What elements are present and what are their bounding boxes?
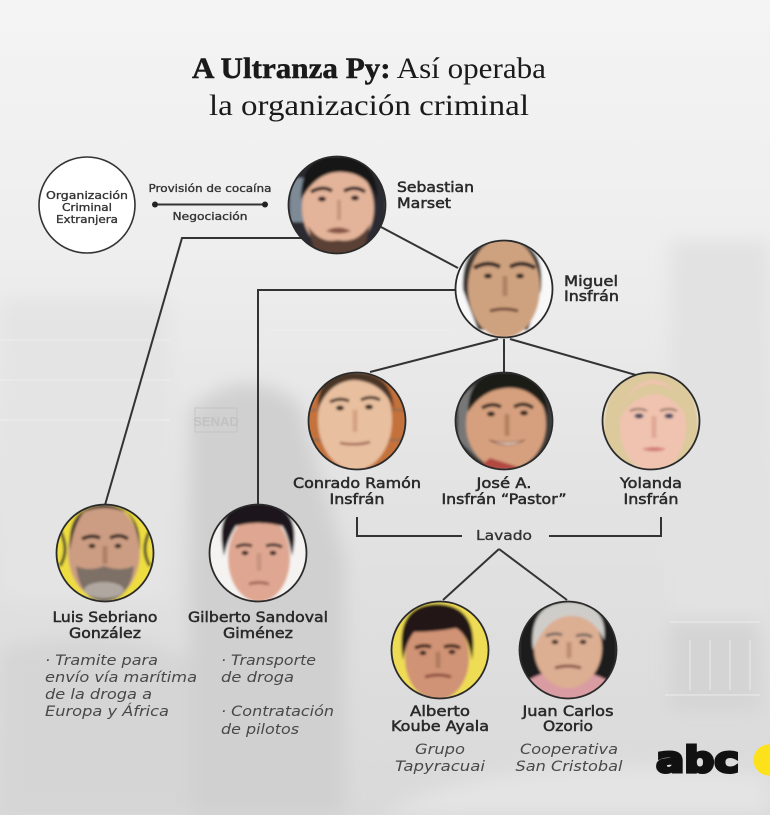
logo: abc: abc — [656, 740, 739, 781]
text: Alberto Koube role: Grupo — [415, 742, 465, 758]
label: José A. Insfrán "Pastor": José A. — [475, 476, 532, 492]
text: Alberto Koube role — [395, 742, 485, 775]
background: faded prison photo: SENAD — [193, 414, 239, 429]
label: José A. Insfrán "Pastor" — [442, 476, 566, 508]
label: Luis Sebriano González: González — [69, 626, 141, 642]
link: cocaine supply and negotiation — [148, 182, 272, 223]
text: Luis Sebriano role — [45, 653, 197, 720]
title: A Ultranza Py: Así operaba — [192, 52, 546, 85]
label: José A. Insfrán "Pastor": Insfrán “Pastor” — [442, 492, 566, 508]
connector lines — [105, 227, 661, 600]
text: Gilberto Sandoval role: de droga — [221, 670, 294, 686]
label: Luis Sebriano González: Luis Sebriano — [52, 610, 158, 626]
link: cocaine supply and negotiation: Negociación — [172, 210, 248, 223]
text: Gilberto Sandoval role — [221, 653, 334, 738]
label: Gilberto Sandoval Giménez: Gilberto Sandoval — [188, 610, 328, 626]
text: Gilberto Sandoval role: de pilotos — [221, 722, 299, 738]
node: foreign criminal organization: Criminal — [62, 201, 112, 214]
label: Juan Carlos Ozorio: Juan Carlos — [521, 704, 614, 720]
portrait: Conrado Ramón Insfrán — [308, 370, 406, 470]
text: Juan Carlos role: Cooperativa — [520, 742, 618, 758]
text: Luis Sebriano role: envío vía marítima — [45, 670, 197, 686]
label: Sebastian Marset: Sebastian — [397, 180, 474, 196]
label: Alberto Koube Ayala — [391, 704, 489, 735]
text: Luis Sebriano role: Europa y África — [45, 703, 169, 720]
label: Juan Carlos Ozorio: Ozorio — [543, 719, 593, 735]
portrait: Alberto Koube Ayala — [391, 601, 489, 700]
portrait: Juan Carlos Ozorio — [519, 601, 617, 702]
portrait: Sebastian Marset — [288, 156, 386, 256]
portrait: Gilberto Sandoval Giménez — [209, 502, 307, 602]
label: Alberto Koube Ayala: Alberto — [410, 704, 470, 720]
text: Juan Carlos role — [516, 742, 622, 775]
text: Luis Sebriano role: · Tramite para — [45, 653, 158, 669]
label: Conrado Ramón Insfrán — [293, 476, 421, 508]
title: la organización criminal — [209, 89, 529, 122]
label: Miguel Insfrán — [564, 274, 619, 305]
label: Yolanda Insfrán: Yolanda — [619, 476, 682, 492]
portrait: José A. Insfrán — [455, 372, 553, 470]
node: foreign criminal organization: Extranjera — [56, 213, 118, 226]
label: Sebastian Marset: Marset — [397, 196, 452, 212]
label: Miguel Insfrán: Miguel — [564, 274, 618, 290]
node: foreign criminal organization: Organización — [46, 189, 128, 202]
label: Lavado: Lavado — [476, 528, 532, 544]
portrait: Yolanda Insfrán — [602, 372, 700, 472]
link: cocaine supply and negotiation: Provisión de cocaína — [148, 182, 272, 195]
label: Miguel Insfrán: Insfrán — [564, 289, 619, 305]
label: Gilberto Sandoval Giménez — [188, 610, 328, 642]
text: Alberto Koube role: Tapyracuai — [395, 759, 485, 775]
label: Yolanda Insfrán: Insfrán — [624, 492, 678, 508]
text: Gilberto Sandoval role: · Transporte — [221, 653, 316, 669]
text: Gilberto Sandoval role: · Contratación — [221, 704, 334, 720]
node: foreign criminal organization — [39, 157, 135, 253]
label: Luis Sebriano González — [52, 610, 158, 642]
portrait: Miguel Insfrán — [455, 238, 553, 338]
text: Luis Sebriano role: de la droga a — [45, 687, 152, 703]
label: Conrado Ramón Insfrán: Insfrán — [330, 492, 384, 508]
label: Yolanda Insfrán — [619, 476, 682, 508]
title — [192, 52, 546, 122]
label: Sebastian Marset — [397, 180, 474, 212]
logo: abc — [656, 740, 770, 781]
label: Conrado Ramón Insfrán: Conrado Ramón — [293, 476, 421, 492]
portrait: Luis Sebriano González — [56, 504, 154, 602]
label: Alberto Koube Ayala: Koube Ayala — [391, 719, 489, 735]
label: Gilberto Sandoval Giménez: Giménez — [223, 626, 293, 642]
label: Juan Carlos Ozorio — [521, 704, 614, 735]
text: Juan Carlos role: San Cristobal — [516, 759, 622, 775]
